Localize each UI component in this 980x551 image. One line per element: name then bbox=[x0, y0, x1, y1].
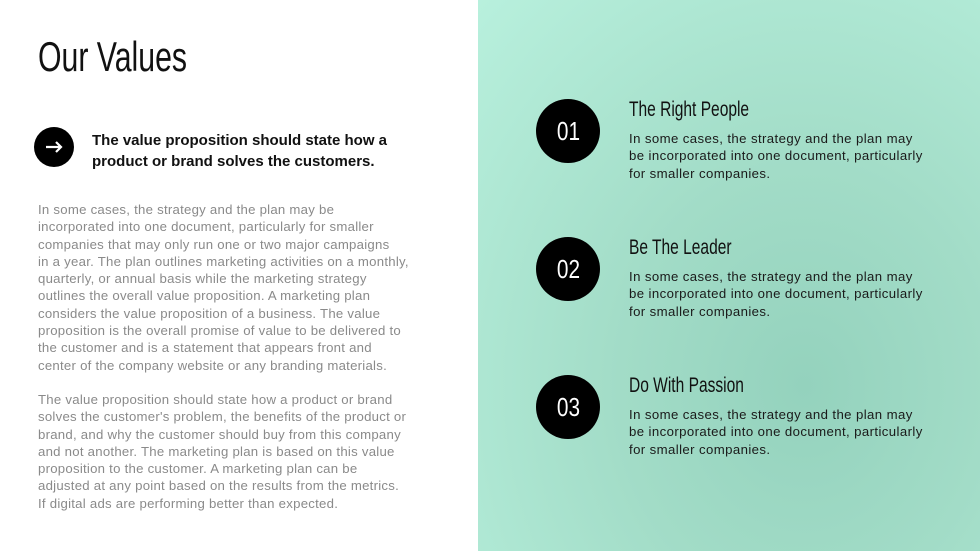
body text 02: for smaller companies. bbox=[629, 304, 770, 319]
item 02 bbox=[536, 236, 923, 319]
icon: number 02 bbox=[536, 237, 600, 301]
body text 01 bbox=[629, 131, 923, 181]
text block: paragraph 2: The value proposition should state how a product or brand bbox=[38, 392, 392, 407]
callout text bbox=[92, 132, 388, 170]
panel: right image background bbox=[478, 0, 980, 551]
text block: paragraph 1: quarterly, or annual basis while the marketing strategy bbox=[38, 271, 367, 286]
body text 01: for smaller companies. bbox=[629, 166, 770, 181]
body text 03: be incorporated into one document, particularly bbox=[629, 424, 923, 439]
icon: arrow circle bbox=[34, 127, 74, 167]
item 01 bbox=[536, 98, 923, 181]
text block: paragraph 2: adjusted at any point based on the results from the metrics. bbox=[38, 478, 399, 493]
body text 02 bbox=[629, 269, 923, 319]
item 03 bbox=[536, 374, 923, 457]
icon: number 01 bbox=[536, 99, 600, 163]
body text 03: for smaller companies. bbox=[629, 442, 770, 457]
icon: number 02: 02 bbox=[556, 254, 580, 284]
heading: The Right People: The Right People bbox=[629, 98, 749, 121]
text block: paragraph 1: incorporated into one document, particularly for smaller bbox=[38, 219, 374, 234]
title: Our Values bbox=[38, 33, 187, 80]
icon: number 01: 01 bbox=[556, 116, 580, 146]
text block: paragraph 1: center of the company website or any branding materials. bbox=[38, 358, 387, 373]
body text 02: In some cases, the strategy and the plan may bbox=[629, 269, 913, 284]
callout text: The value proposition should state how a bbox=[92, 132, 387, 149]
text block: paragraph 1: the customer and is a statement that appears front and bbox=[38, 340, 372, 355]
text block: paragraph 2: brand, and why the customer should buy from this company bbox=[38, 427, 401, 442]
heading: Do With Passion: Do With Passion bbox=[629, 374, 744, 397]
text block: paragraph 2: solves the customer's problem, the benefits of the product or bbox=[38, 409, 406, 424]
body text 02: be incorporated into one document, particularly bbox=[629, 286, 923, 301]
text block: paragraph 2: proposition to the customer. A marketing plan can be bbox=[38, 461, 357, 476]
text block: paragraph 1: proposition is the overall promise of value to be delivered to bbox=[38, 323, 401, 338]
body text 03 bbox=[629, 407, 923, 457]
text block: paragraph 1: in a year. The plan outlines marketing activities on a monthly, bbox=[38, 254, 409, 269]
text block: paragraph 2: If digital ads are performing better than expected. bbox=[38, 496, 338, 511]
body text 03: In some cases, the strategy and the plan may bbox=[629, 407, 913, 422]
text block: paragraph 2 bbox=[38, 392, 406, 511]
body text 01: In some cases, the strategy and the plan may bbox=[629, 131, 913, 146]
text block: paragraph 1: outlines the overall value proposition. A marketing plan bbox=[38, 288, 370, 303]
text block: paragraph 1: considers the value proposition of a business. The value bbox=[38, 306, 380, 321]
text block: paragraph 2: and not another. The marketing plan is based on this value bbox=[38, 444, 395, 459]
callout text: product or brand solves the customers. bbox=[92, 153, 375, 170]
text block: paragraph 1 bbox=[38, 202, 409, 373]
icon: number 03 bbox=[536, 375, 600, 439]
body text 01: be incorporated into one document, particularly bbox=[629, 148, 923, 163]
icon: number 03: 03 bbox=[556, 392, 580, 422]
text block: paragraph 1: In some cases, the strategy and the plan may be bbox=[38, 202, 334, 217]
heading: Be The Leader: Be The Leader bbox=[629, 236, 732, 259]
text block: paragraph 1: companies that may only run one or two major campaigns bbox=[38, 237, 389, 252]
